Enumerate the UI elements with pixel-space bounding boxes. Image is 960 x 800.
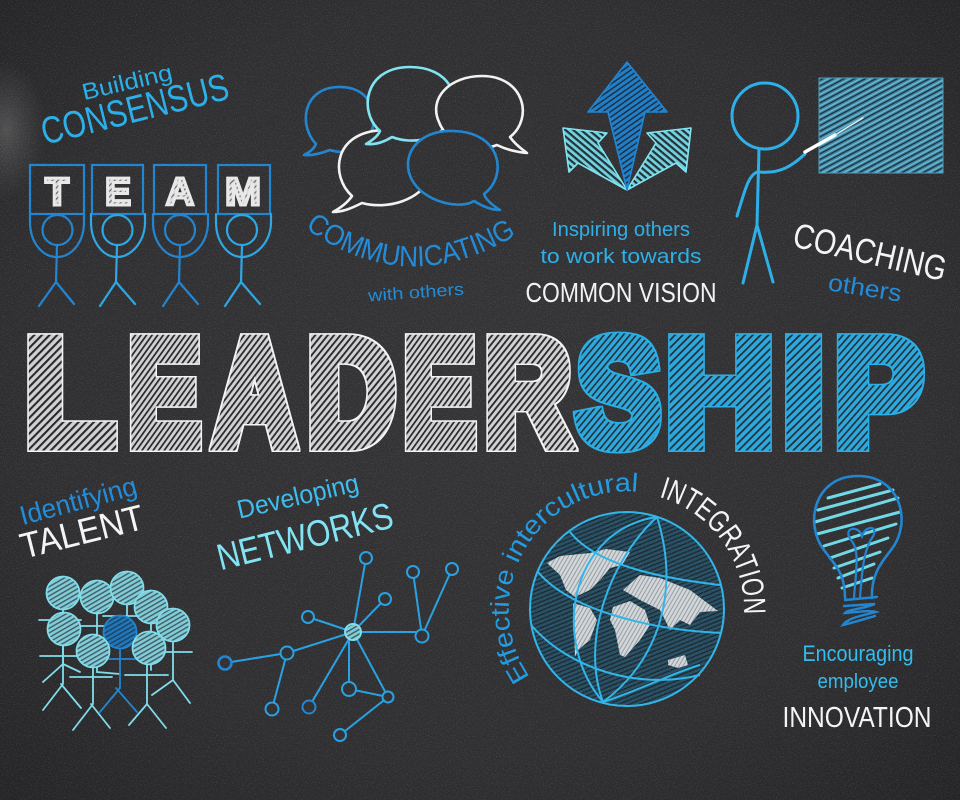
- text: COMMON VISION: COMMON VISION: [526, 277, 716, 308]
- letters TEAM: M: [225, 171, 261, 214]
- panel: innovation: [782, 476, 932, 734]
- text: CONSENSUS: CONSENSUS: [37, 66, 233, 154]
- letters TEAM: T: [45, 171, 69, 214]
- bubble blue lower: [408, 131, 500, 210]
- text: Effective intercultural: Effective intercultural: [490, 472, 637, 684]
- network diagram: [218, 552, 458, 741]
- team figures: [30, 165, 271, 306]
- links: [225, 558, 452, 735]
- front row bodies: [40, 617, 168, 730]
- bulb base: [843, 597, 877, 625]
- dark figure: [97, 648, 140, 712]
- text: to work towards: to work towards: [540, 246, 702, 268]
- blue part: SHIP: S: [577, 309, 660, 477]
- text: Encouraging: Encouraging: [802, 641, 914, 666]
- text: others: others: [826, 269, 904, 308]
- heads: [46, 572, 190, 668]
- board: [819, 78, 943, 173]
- back row bodies: [39, 604, 192, 703]
- globe grid: [530, 512, 724, 706]
- text: INTEGRATION: INTEGRATION: [661, 477, 766, 612]
- panel: identifying talent: [16, 471, 192, 730]
- panel: building consensus: [30, 59, 271, 306]
- letters TEAM: A: [166, 171, 194, 214]
- text: INNOVATION: INNOVATION: [782, 702, 932, 734]
- blue part: SHIP: [577, 308, 923, 477]
- figure M: [216, 165, 271, 306]
- white part: LEADER: E: [403, 308, 476, 477]
- bulb hatching: [815, 484, 900, 588]
- text: Inspiring others: Inspiring others: [552, 219, 690, 241]
- title: LEADERSHIP: [25, 308, 923, 478]
- blue part: SHIP: H: [666, 308, 775, 476]
- bubble blue left: [304, 87, 374, 155]
- text: TALENT: TALENT: [16, 496, 148, 567]
- text: with others: with others: [366, 280, 465, 305]
- stick figure with pointer: [732, 83, 863, 283]
- bubble white right: [436, 76, 527, 153]
- white part: LEADER: D: [307, 309, 396, 478]
- continents: [547, 549, 718, 668]
- text: employee: employee: [818, 671, 898, 693]
- text: Identifying: Identifying: [16, 471, 140, 531]
- white part: LEADER: R: [485, 308, 571, 477]
- icon: light bulb: [814, 476, 902, 625]
- figure A: [153, 165, 208, 306]
- icon: crowd of stick people: [39, 572, 192, 730]
- filament: [848, 528, 874, 598]
- speech bubbles: [304, 67, 527, 212]
- white part: LEADER: A: [214, 309, 296, 477]
- bulb outline: [814, 476, 902, 598]
- panel: developing networks: [213, 467, 458, 741]
- white part: LEADER: [25, 308, 571, 478]
- white part: LEADER: E: [128, 308, 201, 477]
- arrow left: [563, 128, 627, 190]
- panel: coaching: [732, 78, 950, 308]
- arrow right: [627, 128, 691, 190]
- hub node: [345, 624, 361, 640]
- panel: inspiring vision: [526, 62, 716, 308]
- text: NETWORKS: NETWORKS: [213, 495, 397, 578]
- bubble cyan top: [366, 67, 454, 144]
- bubble white lower: [333, 130, 433, 212]
- letters TEAM: E: [105, 171, 131, 214]
- letters TEAM: [45, 171, 261, 214]
- panel: communicating: [302, 66, 528, 305]
- panel: intercultural integration: [490, 472, 766, 707]
- arrow up: [588, 62, 667, 190]
- blue part: SHIP: P: [835, 309, 923, 477]
- figure E: [91, 165, 145, 306]
- icon: three arrows: [563, 62, 691, 190]
- figure T: [30, 165, 84, 306]
- nodes: [218, 552, 458, 741]
- globe: [530, 512, 724, 706]
- white part: LEADER: L: [25, 308, 115, 477]
- text: Building: Building: [79, 59, 175, 105]
- blue part: SHIP: I: [782, 309, 825, 477]
- text: Developing: Developing: [234, 467, 362, 525]
- text: COMMUNICATING: COMMUNICATING: [309, 215, 514, 267]
